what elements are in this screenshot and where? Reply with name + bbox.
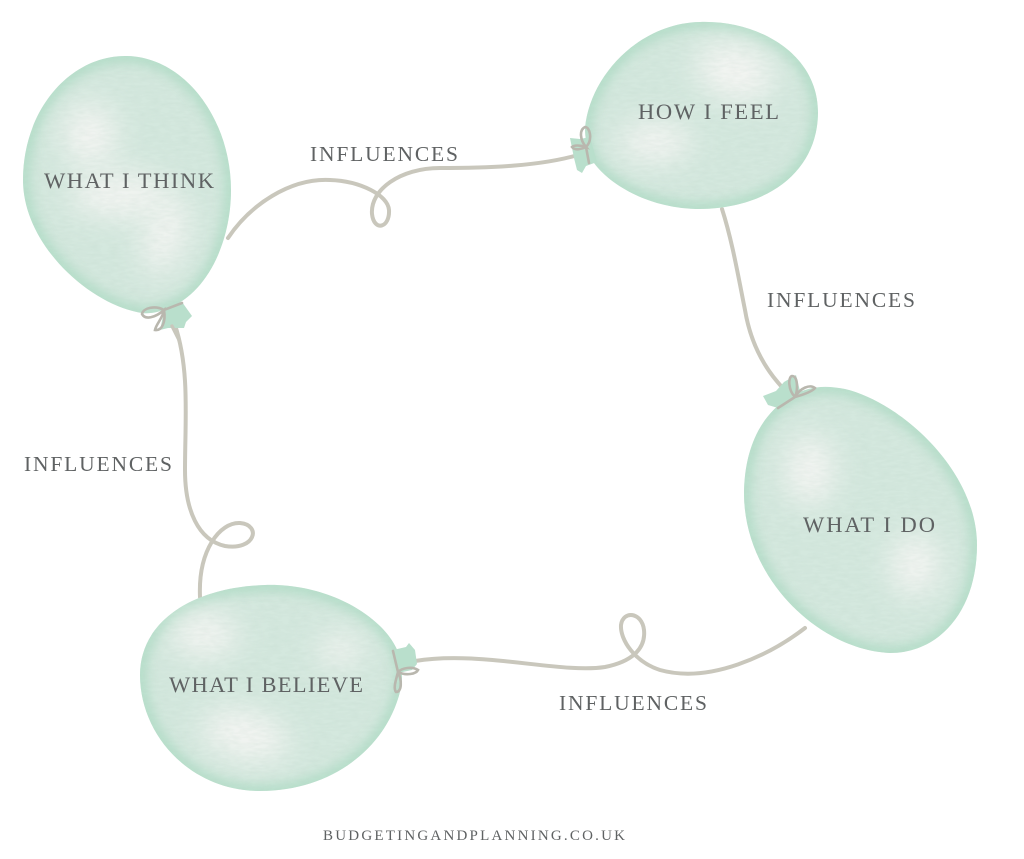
knot bbox=[570, 127, 597, 173]
string: feel to do bbox=[722, 209, 781, 386]
string: think to feel bbox=[228, 155, 578, 238]
balloon: what I believe bbox=[135, 580, 418, 795]
label: influences bottom: INFLUENCES bbox=[559, 691, 707, 715]
knot bbox=[142, 302, 192, 340]
knot bbox=[763, 375, 815, 408]
label: what I think: WHAT I THINK bbox=[44, 168, 215, 193]
label: how I feel: HOW I FEEL bbox=[638, 99, 779, 124]
label: what I believe: WHAT I BELIEVE bbox=[169, 672, 363, 697]
footer: website: BUDGETINGANDPLANNING.CO.UK bbox=[323, 828, 625, 844]
balloon: what I think bbox=[15, 50, 240, 340]
label: influences left: INFLUENCES bbox=[24, 452, 172, 476]
label: what I do: WHAT I DO bbox=[803, 512, 935, 537]
label: influences top: INFLUENCES bbox=[310, 142, 458, 166]
knot bbox=[393, 643, 418, 692]
balloon: what I do bbox=[738, 375, 983, 660]
balloon: how I feel bbox=[570, 15, 825, 215]
string: do to believe bbox=[415, 615, 805, 674]
string: believe to think bbox=[175, 325, 253, 597]
label: influences right: INFLUENCES bbox=[767, 288, 915, 312]
